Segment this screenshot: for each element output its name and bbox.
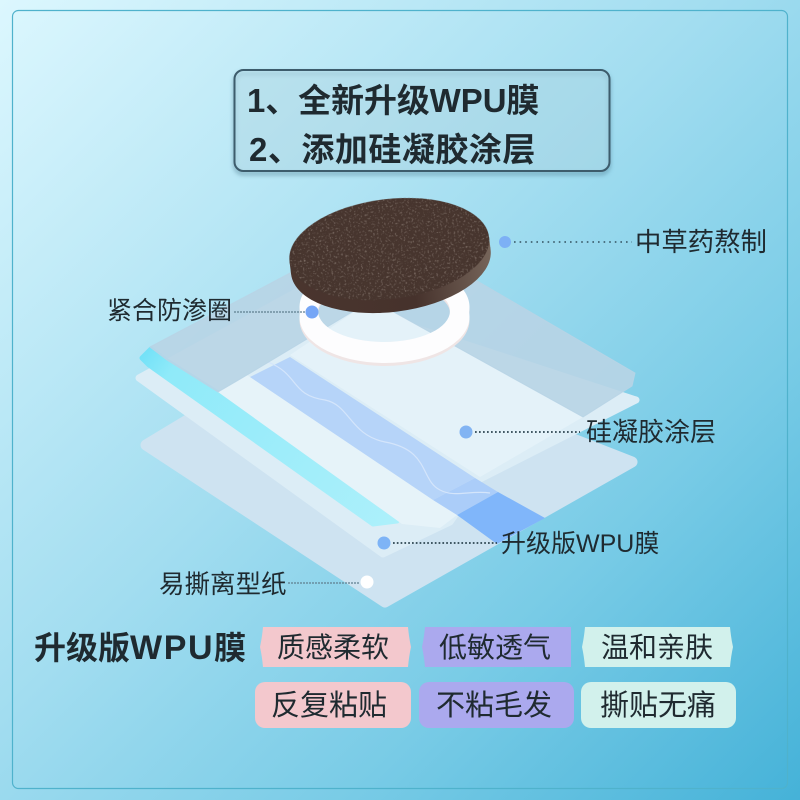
label: sealing ring [107, 297, 318, 325]
title line 2: 2、添加硅凝胶涂层 [249, 131, 536, 168]
tag: skin friendly: 温和亲肤 [601, 632, 713, 663]
label: silicone: 硅凝胶涂层 [586, 417, 716, 447]
hatched film frame [150, 225, 635, 417]
tag: breathable: 低敏透气 [439, 632, 551, 663]
tag: no hair sticking [419, 682, 574, 728]
tag: breathable [422, 627, 571, 667]
herbal disc [283, 187, 497, 324]
lower pad [218, 375, 457, 528]
tag: painless: 撕贴无痛 [600, 689, 716, 722]
layer: release paper [146, 340, 632, 602]
tag: painless [581, 682, 736, 728]
tag: soft texture [260, 627, 411, 667]
label: WPU film [378, 530, 659, 558]
cyan strip [142, 349, 397, 524]
upper pad [290, 300, 583, 477]
wavy line on strip [268, 362, 490, 494]
blue WPU strip [250, 357, 475, 500]
layer: film base [139, 290, 636, 554]
tag: reusable [255, 682, 411, 728]
tag: no hair sticking: 不粘毛发 [436, 689, 552, 722]
white sealing ring [300, 261, 470, 366]
label: silicone [460, 417, 716, 447]
layered patch diagram [139, 187, 636, 602]
label: herbal: 中草药熬制 [635, 227, 767, 257]
label: herbal [499, 227, 767, 257]
tag: reusable: 反复粘贴 [271, 689, 387, 722]
title line 1: 1、全新升级WPU膜 [247, 82, 539, 119]
label: release paper: 易撕离型纸 [159, 571, 287, 599]
label: sealing ring: 紧合防渗圈 [107, 297, 232, 325]
label: release paper [159, 571, 374, 599]
tag: skin friendly [582, 627, 733, 667]
tag: soft texture: 质感柔软 [277, 632, 389, 663]
heading: upgraded WPU film: 升级版WPU膜 [34, 629, 246, 667]
title box [234, 70, 610, 171]
label: WPU film: 升级版WPU膜 [501, 530, 659, 558]
